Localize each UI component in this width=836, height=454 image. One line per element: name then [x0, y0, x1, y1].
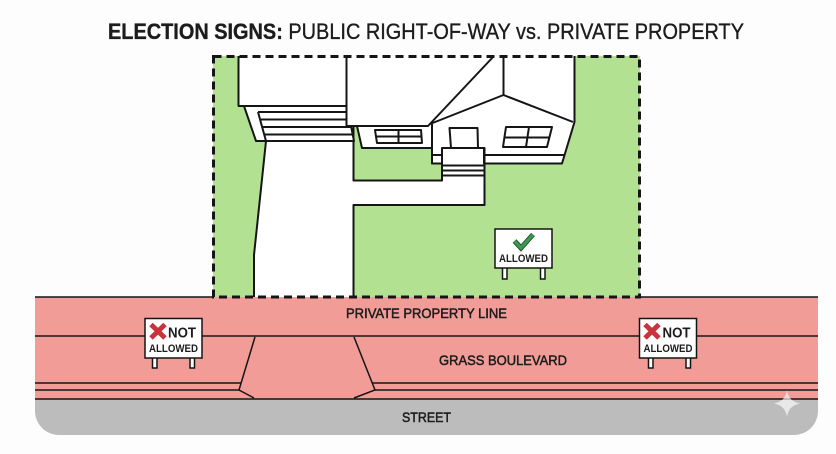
sign: not allowed left: NOT	[168, 326, 196, 342]
sign: not allowed right: NOT	[662, 326, 691, 342]
driveway and walkway	[254, 126, 484, 297]
dashed property line	[214, 56, 640, 297]
street	[35, 400, 818, 435]
garage door	[258, 112, 353, 141]
front steps	[442, 148, 484, 205]
panel: private property	[213, 56, 640, 297]
sign: not allowed right: ALLOWED	[644, 343, 693, 355]
sign: allowed	[495, 229, 552, 279]
driveway apron	[239, 337, 375, 398]
house	[238, 56, 574, 205]
title: ELECTION SIGNS: PUBLIC RIGHT-OF-WAY vs. PRIVATE PROPERTY	[108, 19, 744, 44]
left window	[375, 130, 422, 143]
sign: allowed: ALLOWED	[499, 253, 548, 265]
house outline	[238, 56, 574, 164]
sign: not allowed left	[145, 318, 202, 368]
panel: public right-of-way	[35, 56, 818, 435]
house fill	[238, 56, 574, 164]
label: street: STREET	[402, 409, 451, 425]
icon: red x	[645, 324, 659, 338]
icon: red x	[151, 324, 165, 338]
roof lines	[238, 56, 573, 164]
green lawn	[213, 56, 640, 297]
pink boulevard	[35, 297, 818, 400]
label: private property line: PRIVATE PROPERTY LINE	[346, 305, 507, 321]
sign: not allowed left: ALLOWED	[149, 343, 198, 355]
sign: not allowed right	[640, 318, 696, 368]
right window	[503, 127, 552, 147]
icon: sparkle watermark	[774, 390, 800, 417]
label: grass boulevard: GRASS BOULEVARD	[439, 352, 567, 368]
icon: check mark	[514, 234, 533, 248]
boulevard lines	[35, 297, 818, 399]
front door	[450, 128, 478, 148]
